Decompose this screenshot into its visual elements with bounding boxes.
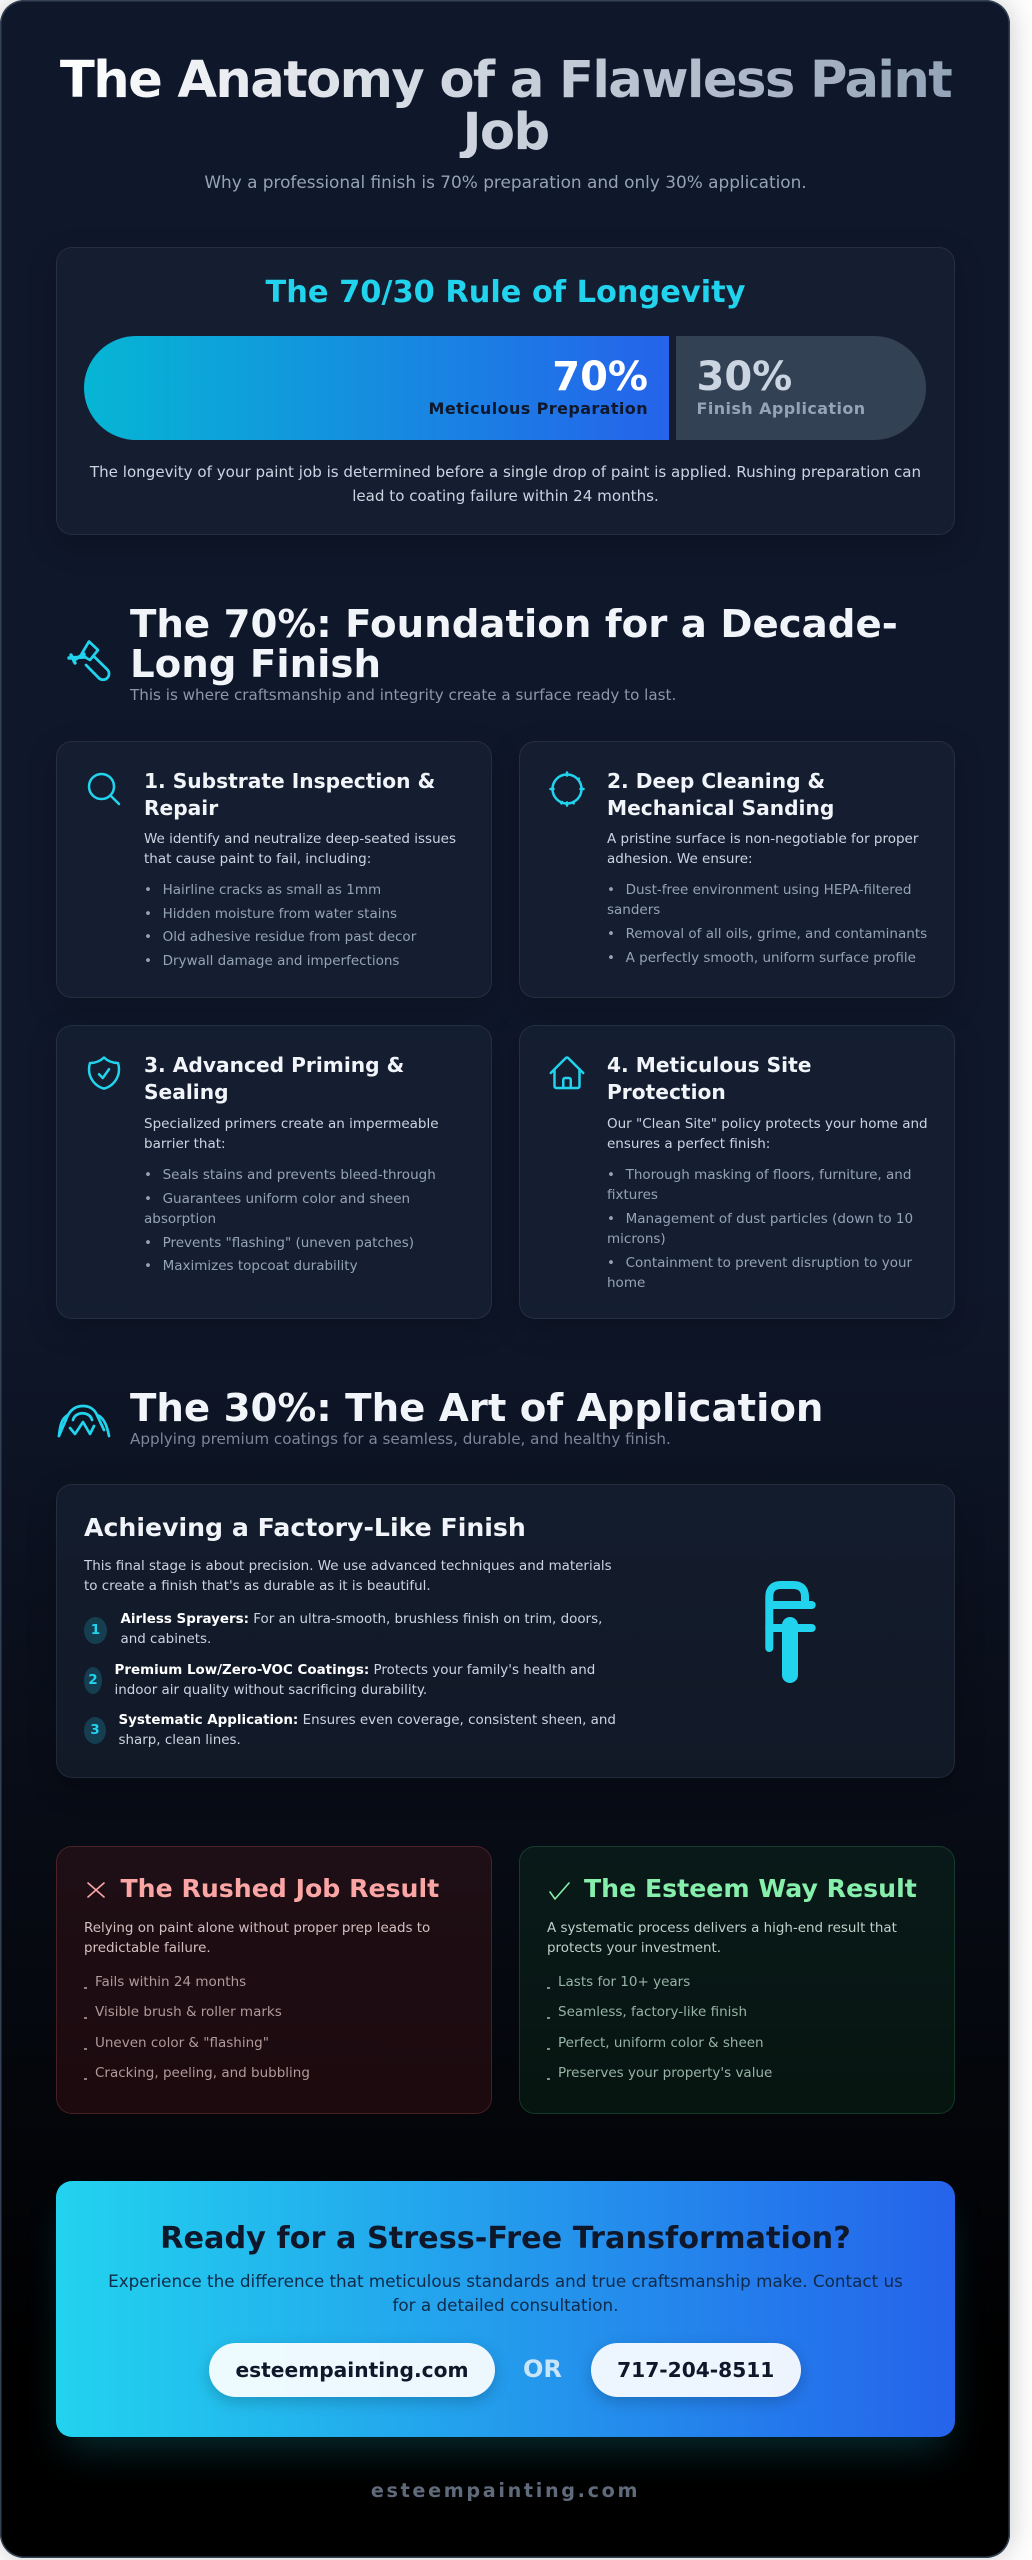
card list: • (144, 1167, 152, 1183)
heading: the 30%: The 30%: The Art of Application (130, 1386, 823, 1430)
card list: Dust-free environment using HEPA-filtered (626, 882, 911, 898)
icon: sanding disc (549, 771, 585, 807)
card list: Guarantees uniform color and sheen (163, 1191, 410, 1207)
card title: Repair (144, 796, 218, 820)
card list: absorption (144, 1211, 216, 1227)
card list: fixtures (607, 1187, 658, 1203)
card text: ensures a perfect finish: (607, 1136, 770, 1152)
card 3: priming and sealing (56, 1025, 492, 1319)
card list (547, 1974, 772, 2081)
card list: Removal of all oils, grime, and contaminants (626, 926, 927, 942)
card text: A pristine surface is non-negotiable for proper (607, 830, 918, 846)
subheading: the 70%: This is where craftsmanship and integrity create a surface ready to last. (130, 686, 676, 704)
card list (144, 882, 416, 969)
card list (607, 882, 927, 966)
bar segment: 70% preparation (84, 336, 669, 440)
step 1 number (84, 1617, 107, 1644)
card list: • (607, 950, 615, 966)
card title: 1. Substrate Inspection & (144, 769, 435, 793)
cta heading: Ready for a Stress-Free Transformation? (160, 2220, 851, 2256)
button: phone: 717-204-8511 (617, 2358, 774, 2382)
card list: • (144, 1191, 152, 1207)
card list: A perfectly smooth, uniform surface profile (626, 950, 916, 966)
icon: cross (87, 1882, 105, 1898)
title (56, 54, 955, 158)
card list: Containment to prevent disruption to your (626, 1255, 912, 1271)
heading: the 70% (130, 602, 898, 686)
icon: house (550, 1056, 584, 1090)
card list: • (144, 929, 152, 945)
card list: • (144, 953, 152, 969)
panel: 70/30 rule (56, 247, 955, 535)
bar segment: 30% application (676, 336, 926, 440)
card list (144, 1167, 436, 1274)
card list: Preserves your property's value (558, 2065, 772, 2081)
card list: • (607, 1211, 615, 1227)
button: phone (590, 2343, 801, 2397)
card list: Hidden moisture from water stains (163, 906, 397, 922)
card text: barrier that: (144, 1136, 226, 1152)
card: esteem way result (519, 1846, 955, 2114)
step 3 text: Systematic Application: Ensures even coverage, consistent sheen, and (118, 1712, 616, 1728)
card list: Uneven color & "flashing" (95, 2035, 269, 2051)
card text: adhesion. We ensure: (607, 851, 753, 867)
panel title: Achieving a Factory-Like Finish (84, 1512, 526, 1542)
card list: Hairline cracks as small as 1mm (163, 882, 381, 898)
card: rushed job result (56, 1846, 492, 2114)
step 3 number (84, 1717, 106, 1744)
cta text (108, 2271, 903, 2315)
card text (144, 830, 456, 867)
step 2 text (114, 1662, 595, 1698)
card title: Sealing (144, 1080, 229, 1104)
30% value: 30% (696, 354, 792, 400)
card list: home (607, 1275, 645, 1291)
card title: The Rushed Job Result (120, 1874, 439, 1902)
card list: Seals stains and prevents bleed-through (163, 1167, 436, 1183)
title: The Anatomy of a Flawless Paint (60, 50, 951, 110)
card title: The Esteem Way Result (584, 1874, 917, 1902)
step 1 text (120, 1612, 602, 1647)
step 3 number: 3 (90, 1722, 100, 1738)
70% label: Meticulous Preparation (429, 398, 648, 418)
button: website (209, 2343, 495, 2397)
card text: Specialized primers create an impermeable (144, 1116, 439, 1132)
card list: sanders (607, 902, 660, 918)
card title (144, 1053, 404, 1104)
card 1: substrate inspection (56, 741, 492, 998)
card list: Lasts for 10+ years (558, 1974, 690, 1990)
card list: Visible brush & roller marks (95, 2004, 282, 2020)
icon: spray gun (67, 640, 110, 682)
card text (607, 1116, 928, 1152)
button: website: esteempainting.com (235, 2358, 469, 2382)
card text: Our "Clean Site" policy protects your home and (607, 1116, 928, 1132)
card list: microns) (607, 1231, 666, 1247)
card title: 3. Advanced Priming & (144, 1053, 404, 1077)
card text (607, 830, 918, 867)
card 4: site protection (519, 1025, 955, 1319)
card list: • (144, 1235, 152, 1251)
card title: 4. Meticulous Site (607, 1053, 811, 1077)
rule explanation: lead to coating failure within 24 months. (352, 487, 659, 505)
footer: esteempainting.com (371, 2479, 640, 2502)
step 3 text (118, 1712, 616, 1748)
card 2: deep cleaning (519, 741, 955, 998)
card title: Mechanical Sanding (607, 796, 834, 820)
card title (144, 769, 435, 820)
card text: A systematic process delivers a high-end result that (547, 1920, 897, 1936)
card list: Cracking, peeling, and bubbling (95, 2065, 310, 2081)
step 2 number: 2 (88, 1672, 98, 1688)
step 2 text: Premium Low/Zero-VOC Coatings: Protects your family's health and (114, 1662, 595, 1678)
heading: 70/30 rule: The 70/30 Rule of Longevity (266, 275, 745, 310)
card list: • (144, 906, 152, 922)
card list: Perfect, uniform color & sheen (558, 2035, 764, 2051)
cta text: for a detailed consultation. (392, 2295, 618, 2315)
card list: Seamless, factory-like finish (558, 2004, 747, 2020)
rule explanation (90, 463, 921, 505)
card list: • (144, 1258, 152, 1274)
card list (607, 1167, 913, 1291)
step 3 text: sharp, clean lines. (118, 1733, 241, 1748)
card text: protects your investment. (547, 1941, 721, 1956)
70% value: 70% (552, 354, 648, 400)
icon: arched coating (58, 1404, 110, 1438)
card title: 2. Deep Cleaning & (607, 769, 825, 793)
icon: magnifier (88, 772, 120, 806)
card list: Maximizes topcoat durability (163, 1258, 358, 1274)
card list: Drywall damage and imperfections (163, 953, 399, 969)
card text (144, 1116, 439, 1152)
card list: Management of dust particles (down to 10 (626, 1211, 913, 1227)
card text: We identify and neutralize deep-seated issues (144, 830, 456, 846)
card list: • (144, 882, 152, 898)
cta text: Experience the difference that meticulous standards and true craftsmanship make. Contact us (108, 2271, 903, 2291)
card list: • (607, 1167, 615, 1183)
step 1 text: and cabinets. (120, 1632, 211, 1647)
card text (547, 1920, 897, 1956)
card title: Protection (607, 1080, 726, 1104)
call to action (56, 2181, 955, 2437)
subheading: the 30%: Applying premium coatings for a seamless, durable, and healthy finish. (130, 1430, 671, 1448)
card title (607, 1053, 811, 1104)
icon: pipe wrench (765, 1581, 816, 1683)
or separator: OR (523, 2355, 562, 2383)
card list: • (607, 926, 615, 942)
card text: that cause paint to fail, including: (144, 851, 371, 867)
panel text: to create a finish that's as durable as it is beautiful. (84, 1579, 431, 1594)
card text (84, 1920, 430, 1956)
rule explanation: The longevity of your paint job is determined before a single drop of paint is applied. Rushing preparation can (90, 463, 921, 481)
panel text: This final stage is about precision. We use advanced techniques and materials (84, 1558, 612, 1574)
card list: Old adhesive residue from past decor (163, 929, 416, 945)
step 2 number (84, 1667, 102, 1694)
card list: Fails within 24 months (95, 1974, 246, 1990)
heading: the 70%: The 70%: Foundation for a Decade- (130, 602, 898, 646)
30% label: Finish Application (696, 398, 866, 418)
card list: Prevents "flashing" (uneven patches) (163, 1235, 414, 1251)
subtitle: Why a professional finish is 70% preparation and only 30% application. (204, 172, 807, 192)
icon: shield check (88, 1056, 120, 1090)
card text: predictable failure. (84, 1941, 211, 1956)
card text: Relying on paint alone without proper prep leads to (84, 1920, 430, 1936)
icon: check (549, 1882, 570, 1900)
heading: the 70%: Long Finish (130, 642, 381, 686)
panel: factory-like finish (56, 1484, 955, 1778)
step 1 number: 1 (91, 1622, 100, 1638)
card list: • (607, 1255, 615, 1271)
panel text (84, 1558, 612, 1594)
card title (607, 769, 834, 820)
step 2 text: indoor air quality without sacrificing durability. (114, 1683, 427, 1698)
title: Job (462, 102, 549, 162)
card list (84, 1974, 310, 2081)
step 1 text: Airless Sprayers: For an ultra-smooth, brushless finish on trim, doors, (120, 1612, 602, 1626)
card list: • (607, 882, 615, 898)
card list: Thorough masking of floors, furniture, and (626, 1167, 911, 1183)
